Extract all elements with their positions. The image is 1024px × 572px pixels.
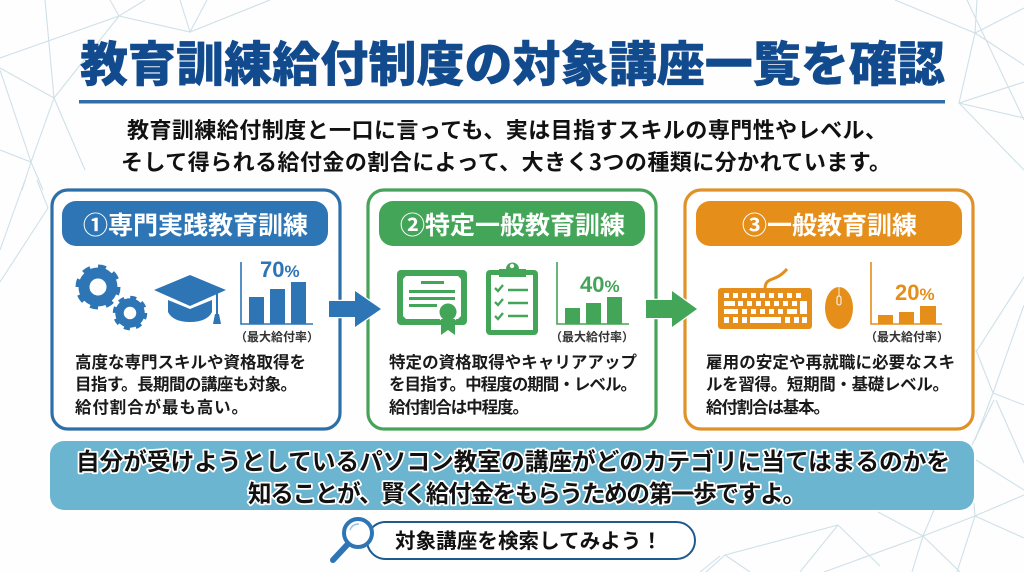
- icon: keyboard: [718, 269, 812, 329]
- arrow: panel 2 to panel 3: [646, 291, 697, 327]
- icon: mouse: [825, 287, 853, 329]
- title: 教育訓練給付制度の対象講座一覧を確認: [80, 25, 945, 95]
- callout band: 自分が受けようとしているパソコン教室の講座がどのカテゴリに当てはまるのかを: [76, 443, 950, 477]
- search button: [333, 519, 695, 560]
- bar chart: 40%: 40%: [580, 272, 620, 297]
- icon: magnifying glass: [333, 519, 372, 560]
- bar chart: 20%: [865, 262, 949, 345]
- arrow: panel 1 to panel 2: [329, 291, 381, 327]
- panel 1 description: 目指す。長期間の講座も対象。: [75, 371, 297, 395]
- panel 3 description: [706, 349, 955, 418]
- icon: graduation cap: [154, 275, 226, 324]
- intro text: そして得られる給付金の割合によって、大きく3つの種類に分かれています。: [121, 145, 891, 177]
- panel 3 description: 雇用の安定や再就職に必要なスキ: [706, 349, 955, 373]
- panel 2 header: ②特定一般教育訓練: [400, 206, 625, 242]
- panel 1 header: ①専門実践教育訓練: [83, 206, 308, 242]
- panel 2 description: を目指す。中程度の期間・レベル。: [389, 371, 637, 395]
- panel 3 description: 給付割合は基本。: [706, 394, 830, 418]
- bar chart: 70%: （最大給付率）: [235, 328, 319, 345]
- panel: general training: [685, 190, 973, 429]
- intro text: [121, 113, 891, 177]
- panel 3 header: ③一般教育訓練: [742, 206, 917, 242]
- intro text: 教育訓練給付制度と一口に言っても、実は目指すスキルの専門性やレベル、: [127, 113, 887, 145]
- panel 2 description: [389, 349, 638, 418]
- callout band: 知ることが、賢く給付金をもらうための第一歩ですよ。: [248, 475, 806, 509]
- bar chart: 40%: （最大給付率）: [550, 328, 634, 345]
- panel 1 description: [75, 349, 306, 418]
- panel 1 description: 高度な専門スキルや資格取得を: [75, 349, 306, 373]
- icon: gears: [78, 268, 145, 328]
- panel: specific general training: [368, 190, 656, 429]
- panel: specialized practical training: [52, 190, 340, 429]
- panel 1 description: 給付割合が最も高い。: [75, 394, 248, 418]
- bar chart: 40%: [550, 262, 634, 345]
- panel 2 description: 特定の資格取得やキャリアアップ: [389, 349, 638, 373]
- bar chart: 20%: 20%: [895, 280, 935, 305]
- bar chart: 70%: 70%: [260, 257, 300, 282]
- bar chart: 70%: [235, 257, 319, 345]
- bar chart: 20%: （最大給付率）: [865, 328, 949, 345]
- panel 2 header: [379, 201, 645, 246]
- callout band: [50, 441, 974, 510]
- panel 1 header: [62, 201, 328, 246]
- icon: certificate: [397, 270, 467, 335]
- icon: clipboard checklist: [486, 262, 538, 335]
- panel 2 description: 給付割合は中程度。: [389, 394, 529, 418]
- panel 3 header: [696, 201, 962, 246]
- panel 3 description: ルを習得。短期間・基礎レベル。: [706, 371, 949, 395]
- search button: 対象講座を検索してみよう！: [395, 524, 662, 554]
